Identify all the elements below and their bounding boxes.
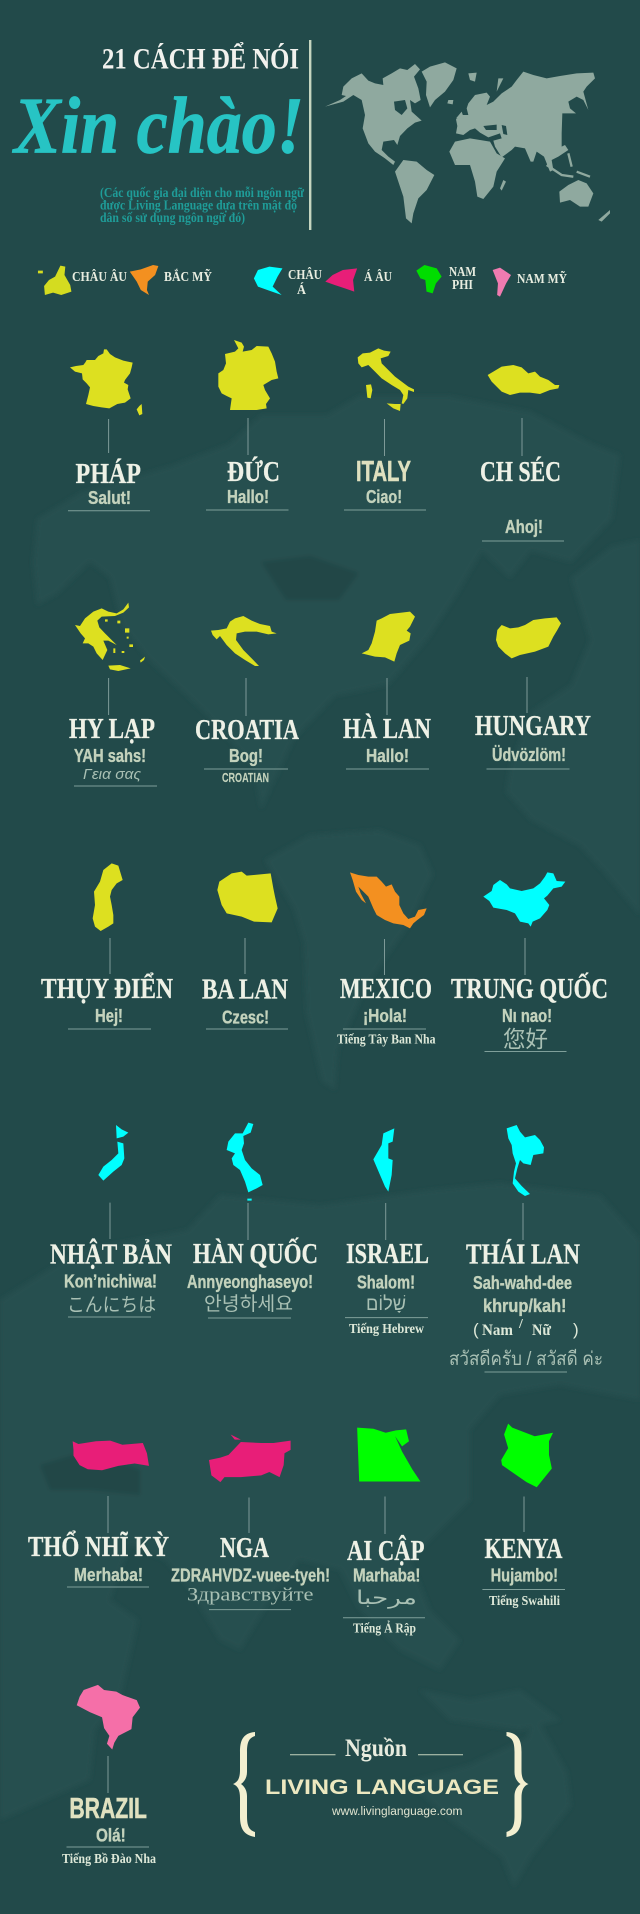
panel: Egypt: AI CẬP bbox=[347, 1534, 424, 1567]
panel: Czech Republic bbox=[480, 365, 564, 541]
panel: Russia: Здравствуйте bbox=[187, 1585, 314, 1606]
panel: Mexico: MEXICO bbox=[340, 973, 432, 1005]
panel: Egypt: مرحبا bbox=[356, 1587, 417, 1609]
panel: Thailand bbox=[449, 1125, 603, 1372]
panel: Thailand: / bbox=[518, 1317, 524, 1332]
panel: France: PHÁP bbox=[76, 457, 141, 490]
panel: Thailand: ) bbox=[573, 1320, 579, 1339]
legend: South America bbox=[493, 268, 567, 297]
panel: Egypt: Marhaba! bbox=[353, 1566, 420, 1586]
panel: Japan: Kon’nichiwa! bbox=[64, 1272, 157, 1292]
panel: Brazil bbox=[62, 1685, 156, 1867]
icon: right brace bbox=[506, 1732, 528, 1837]
panel: Japan bbox=[50, 1125, 172, 1317]
panel: Kenya bbox=[482, 1424, 565, 1609]
legend: Asia bbox=[254, 266, 322, 298]
panel: Sweden: THỤY ĐIỂN bbox=[41, 972, 173, 1005]
panel: Turkey bbox=[28, 1441, 169, 1587]
panel: Italy: ITALY bbox=[356, 456, 411, 488]
panel: Kenya: Hujambo! bbox=[491, 1566, 558, 1586]
source credit bbox=[233, 1732, 528, 1837]
panel: Brazil: Olá! bbox=[96, 1826, 126, 1846]
legend: Eurasia bbox=[325, 268, 392, 292]
icon: left brace bbox=[233, 1732, 255, 1837]
panel: Korea: 안녕하세요 bbox=[204, 1293, 293, 1315]
panel: Kenya: Tiếng Swahili bbox=[489, 1594, 560, 1609]
panel: China: 您好 bbox=[503, 1026, 548, 1052]
panel: Thailand: khrup/kah! bbox=[483, 1296, 566, 1316]
legend: Asia: Á bbox=[297, 281, 307, 298]
heading: Xin chào: Xin chào! bbox=[11, 83, 304, 171]
note text: được Living Language dựa trên mật độ bbox=[100, 198, 297, 214]
panel: Germany bbox=[206, 340, 288, 510]
panel: Hungary bbox=[475, 617, 591, 769]
panel: Turkey: THỔ NHĨ KỲ bbox=[28, 1529, 169, 1563]
panel: Korea bbox=[187, 1123, 318, 1318]
panel: Japan: NHẬT BẢN bbox=[50, 1238, 172, 1270]
panel: Czech Republic: Ahoj! bbox=[505, 517, 543, 537]
panel: Croatia: Bog! bbox=[229, 746, 263, 766]
note text: dân số sử dụng ngôn ngữ đó) bbox=[100, 211, 245, 226]
panel: Hungary: HUNGARY bbox=[475, 710, 591, 742]
legend bbox=[38, 265, 567, 298]
panel: Korea: Annyeonghaseyo! bbox=[187, 1272, 313, 1292]
panel: Mexico: Tiếng Tây Ban Nha bbox=[337, 1032, 436, 1048]
panel: China bbox=[451, 872, 608, 1052]
panel: Italy: Ciao! bbox=[366, 487, 402, 507]
panel: Israel bbox=[345, 1128, 429, 1337]
panel: Thailand: ( bbox=[473, 1320, 479, 1339]
panel: Thailand: Sah-wahd-dee bbox=[473, 1273, 572, 1293]
panel: Russia bbox=[171, 1434, 330, 1610]
legend: Europe bbox=[38, 266, 127, 295]
panel: Thailand: THÁI LAN bbox=[466, 1238, 580, 1270]
panel: Croatia: CROATIAN bbox=[222, 771, 269, 785]
panel: Brazil: Tiếng Bồ Đào Nha bbox=[62, 1852, 156, 1867]
panel: Italy bbox=[344, 348, 426, 510]
legend: Africa: PHI bbox=[452, 278, 473, 293]
panel: France bbox=[68, 349, 150, 511]
panel: Sweden: Hej! bbox=[95, 1006, 123, 1026]
panel: Brazil: BRAZIL bbox=[69, 1793, 147, 1825]
note text: (Các quốc gia đại diện cho mỗi ngôn ngữ bbox=[100, 185, 304, 201]
panel: Thailand: สวัสดีครับ / สวัสดี ค่ะ bbox=[449, 1348, 603, 1370]
world map bbox=[325, 62, 610, 223]
panel: Croatia bbox=[195, 616, 299, 785]
panel: Russia: NGA bbox=[220, 1532, 269, 1564]
panel: Poland: Czesc! bbox=[222, 1008, 269, 1028]
panel: Mexico bbox=[337, 872, 436, 1048]
note text bbox=[100, 185, 304, 226]
panel: Greece: Γεια σας bbox=[83, 766, 142, 783]
panel: Germany: ĐỨC bbox=[227, 455, 280, 488]
panel: Israel: שָׁלוֹם bbox=[366, 1294, 406, 1315]
panel: Czech Republic: CH SÉC bbox=[480, 455, 561, 488]
legend: South America: NAM MỸ bbox=[517, 269, 567, 287]
panel: Thailand: Nữ bbox=[532, 1322, 551, 1339]
panel: Israel: Tiếng Hebrew bbox=[349, 1322, 425, 1337]
panel: Croatia: CROATIA bbox=[195, 714, 299, 746]
panel: Egypt: Tiếng Ả Rập bbox=[353, 1620, 416, 1637]
background world map bbox=[0, 396, 640, 1887]
legend: North America bbox=[130, 265, 212, 295]
panel: Korea: HÀN QUỐC bbox=[193, 1236, 318, 1270]
panel: Greece bbox=[69, 603, 157, 786]
panel: Sweden bbox=[41, 863, 173, 1029]
panel: Thailand: Nam bbox=[482, 1322, 514, 1339]
panel: Turkey: Merhaba! bbox=[74, 1565, 143, 1585]
panel: Netherlands bbox=[343, 612, 431, 769]
source name: LIVING LANGUAGE bbox=[265, 1776, 499, 1799]
panel: Greece: HY LẠP bbox=[69, 713, 155, 745]
legend: Asia: CHÂU bbox=[288, 266, 322, 283]
panel: Germany: Hallo! bbox=[227, 487, 269, 507]
vertical divider bbox=[309, 40, 311, 230]
panel: Hungary: Üdvözlöm! bbox=[492, 745, 566, 765]
panel: Poland bbox=[202, 872, 288, 1029]
panel: France: Salut! bbox=[88, 488, 131, 508]
panel: Mexico: ¡Hola! bbox=[363, 1006, 407, 1026]
panel: Greece: YAH sahs! bbox=[74, 746, 146, 766]
panel: Israel: ISRAEL bbox=[346, 1238, 429, 1270]
heading: 21 ways: 21 CÁCH ĐỂ NÓI bbox=[102, 42, 299, 76]
panel: China: Nι nao! bbox=[502, 1006, 552, 1026]
source url: www.livinglanguage.com bbox=[331, 1806, 462, 1818]
legend: Africa bbox=[416, 265, 476, 293]
panel: Netherlands: HÀ LAN bbox=[343, 712, 431, 745]
panel: Egypt bbox=[343, 1428, 425, 1637]
panel: Russia: ZDRAHVDZ-vuee-tyeh! bbox=[171, 1566, 330, 1586]
legend: Europe: CHÂU ÂU bbox=[72, 268, 127, 285]
panel: Japan: こんにちは bbox=[67, 1295, 156, 1316]
panel: Kenya: KENYA bbox=[484, 1533, 563, 1565]
title bbox=[11, 42, 304, 171]
legend: North America: BẮC MỸ bbox=[164, 267, 212, 285]
legend: Eurasia: Á ÂU bbox=[364, 268, 392, 285]
source heading: Nguồn bbox=[345, 1735, 407, 1762]
panel: Israel: Shalom! bbox=[357, 1273, 415, 1293]
panel: Netherlands: Hallo! bbox=[366, 746, 409, 766]
panel: Poland: BA LAN bbox=[202, 974, 288, 1006]
legend: Africa: NAM bbox=[449, 265, 476, 280]
